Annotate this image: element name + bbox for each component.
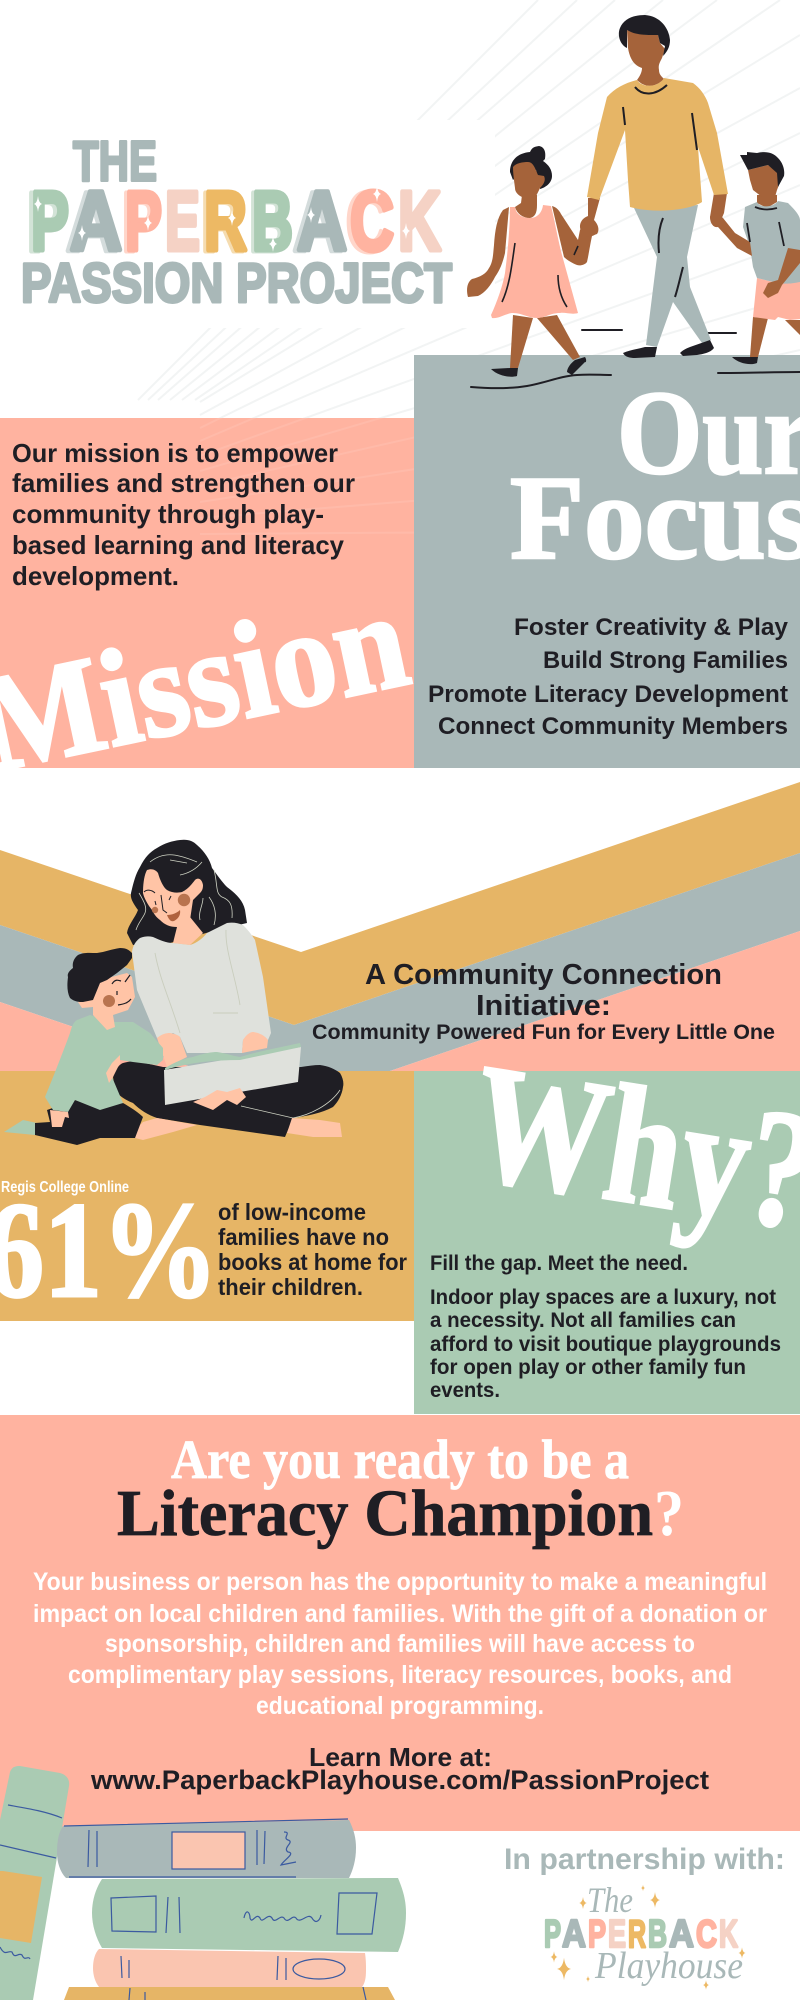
title word: THE: THE (73, 130, 157, 194)
title word shadow: B (249, 175, 290, 269)
appeal paragraph: sponsorship, children and families will have access to (105, 1630, 695, 1658)
why text block (430, 1252, 781, 1402)
title word: PAPERBACK: K (398, 174, 441, 268)
heading: ready: Are you ready to be a (171, 1429, 629, 1490)
why text block: Indoor play spaces are a luxury, not (430, 1286, 776, 1309)
figure: boy (710, 152, 800, 364)
title word: PAPERBACK: P (31, 174, 69, 268)
logo word: PAPERBACK: P (544, 1913, 561, 1956)
book: gold (64, 1987, 395, 2000)
focus list: Connect Community Members (438, 713, 788, 740)
book: peach (93, 1949, 366, 1987)
boy hair (740, 152, 784, 187)
book: gray (57, 1819, 356, 1878)
logo word: PAPERBACK: B (648, 1913, 667, 1956)
logo word: PAPERBACK: P (588, 1913, 606, 1956)
ground strokes (471, 330, 800, 388)
statistic text: books at home for (218, 1249, 407, 1275)
man neck and face (627, 30, 665, 86)
logo word: PAPERBACK: R (628, 1913, 646, 1956)
title word shadow: P (122, 175, 159, 269)
girl dress (491, 205, 578, 318)
panel: our focus background (414, 355, 800, 768)
heading: community connection: A Community Connection (365, 959, 722, 991)
statistic text: their children. (218, 1274, 363, 1300)
boy legs (750, 317, 768, 357)
title word shadow (27, 175, 390, 269)
panel: mission (0, 418, 414, 768)
heading: community connection: Initiative: (476, 990, 611, 1022)
figure: man (580, 15, 728, 358)
logo script: Playhouse: Playhouse (594, 1945, 743, 1987)
open book (164, 1043, 301, 1110)
child neck and face (78, 973, 135, 1030)
why text block: afford to visit boutique playgrounds (430, 1333, 781, 1356)
focus list: Promote Literacy Development (428, 681, 788, 708)
logo word: PAPERBACK: A (562, 1913, 586, 1956)
logo word: PAPERBACK: A (669, 1913, 694, 1956)
book: leaning green (0, 1766, 69, 2000)
logo script: The: The (587, 1880, 633, 1920)
boy neck (757, 195, 777, 208)
title word shadow: A (66, 175, 118, 269)
mother feet (287, 1118, 342, 1137)
title word shadow: P (27, 175, 65, 269)
illustration: family walking (467, 15, 800, 388)
panel: why background (414, 1071, 800, 1414)
book: green (92, 1878, 406, 1952)
mother eyes (144, 890, 171, 913)
girl face (513, 162, 545, 197)
statistic text: of low-income (218, 1199, 366, 1225)
girl shoes (491, 368, 518, 377)
focus list (428, 614, 789, 740)
title word: PAPERBACK: B (252, 174, 293, 268)
mother cheek (178, 894, 190, 906)
call to action: www.PaperbackPlayhouse.com/PassionProject (90, 1765, 709, 1795)
statistic text: families have no (218, 1224, 389, 1250)
logo word: PAPERBACK (544, 1913, 738, 1956)
title word: PAPERBACK: C (350, 174, 394, 268)
man trousers (634, 205, 711, 347)
mother neck (173, 917, 203, 945)
title word shadow: A (293, 175, 343, 269)
girl hair (510, 146, 552, 189)
heading: Literacy Champion: Literacy Champion (117, 1477, 653, 1550)
man arms (580, 198, 600, 237)
logo stars (550, 1885, 746, 1990)
mother hair highlights (136, 855, 232, 930)
boy arms (710, 214, 752, 256)
why text block: for open play or other family fun (430, 1356, 746, 1379)
mother mouth (167, 910, 180, 921)
girl right arm and hand (552, 206, 596, 265)
man shoes (623, 347, 657, 358)
mission statement: based learning and literacy (12, 530, 345, 560)
child sweater (45, 1015, 163, 1112)
mother hair (127, 840, 247, 945)
panel: statistic background (0, 1071, 416, 1321)
call to action (90, 1742, 709, 1795)
why text block: a necessity. Not all families can (430, 1309, 736, 1332)
chevron background bands (0, 782, 800, 1071)
illustration: stack of books (0, 1766, 406, 2000)
logo word: PAPERBACK: C (696, 1913, 717, 1956)
title word: PAPERBACK (31, 174, 441, 268)
source credit: Regis College Online (1, 1179, 129, 1196)
mission statement: development. (12, 561, 179, 591)
logo: The Paperback Playhouse (544, 1880, 746, 1990)
appeal paragraph (33, 1568, 767, 1720)
statistic text (218, 1199, 407, 1300)
statistic: 61 percent (0, 1174, 407, 1326)
mission statement: families and strengthen our (12, 468, 355, 498)
heading: Our Focus (510, 392, 800, 561)
why text block: events. (430, 1379, 500, 1402)
child hair (67, 948, 132, 1002)
call to action: Learn More at: (309, 1742, 492, 1772)
girl neck (515, 195, 537, 218)
boy shorts (753, 278, 800, 320)
child sock (4, 1120, 37, 1135)
illustration: mother reading to child (4, 840, 343, 1145)
title word: PAPERBACK: E (165, 174, 200, 268)
mother hands on book (193, 1088, 246, 1110)
title word: PAPERBACK: R (204, 174, 247, 268)
partnership heading: In partnership with: (504, 1843, 785, 1876)
mother face (143, 869, 203, 927)
girl legs (510, 315, 533, 368)
title word shadow: R (201, 175, 244, 269)
figure: girl (467, 146, 596, 377)
boy shoe (732, 357, 758, 364)
mother forearms (157, 1033, 187, 1067)
man sweater (587, 78, 728, 211)
mother sweater (132, 923, 271, 1053)
mission statement: community through play- (12, 499, 324, 529)
logo sparkles (34, 186, 410, 252)
mother legs (113, 1061, 343, 1137)
title word: PAPERBACK: A (297, 174, 347, 268)
appeal paragraph: educational programming. (256, 1692, 544, 1720)
logo word: PAPERBACK: E (608, 1913, 626, 1956)
why text block: Fill the gap. Meet the need. (430, 1252, 688, 1275)
child hands (106, 1055, 120, 1083)
focus list: Build Strong Families (543, 647, 788, 674)
logo word: PAPERBACK: K (719, 1913, 738, 1956)
subheading: Community Powered Fun for Every Little One (312, 1021, 775, 1044)
panel: our focus content (428, 366, 800, 740)
child legs (35, 1100, 143, 1145)
girl left arm (467, 207, 509, 297)
title logo: The Paperback Passion Project (21, 130, 452, 314)
title words: PASSION PROJECT: PASSION PROJECT (21, 251, 452, 314)
child cheek (103, 995, 115, 1007)
appeal paragraph: complimentary play sessions, literacy resources, books, and (68, 1661, 732, 1689)
title word: PAPERBACK: A (70, 174, 122, 268)
title word shadow: C (346, 175, 390, 269)
focus list: Foster Creativity & Play (514, 614, 789, 641)
mission statement (12, 438, 355, 591)
title word: PAPERBACK: P (125, 174, 162, 268)
boy face (748, 165, 782, 197)
heading: question mark: ? (654, 1477, 684, 1550)
panel: literacy champion (0, 1415, 800, 1831)
boy shirt (743, 201, 800, 284)
heading: community connection (312, 959, 775, 1044)
mission statement: Our mission is to empower (12, 438, 338, 468)
man hair (619, 15, 670, 56)
